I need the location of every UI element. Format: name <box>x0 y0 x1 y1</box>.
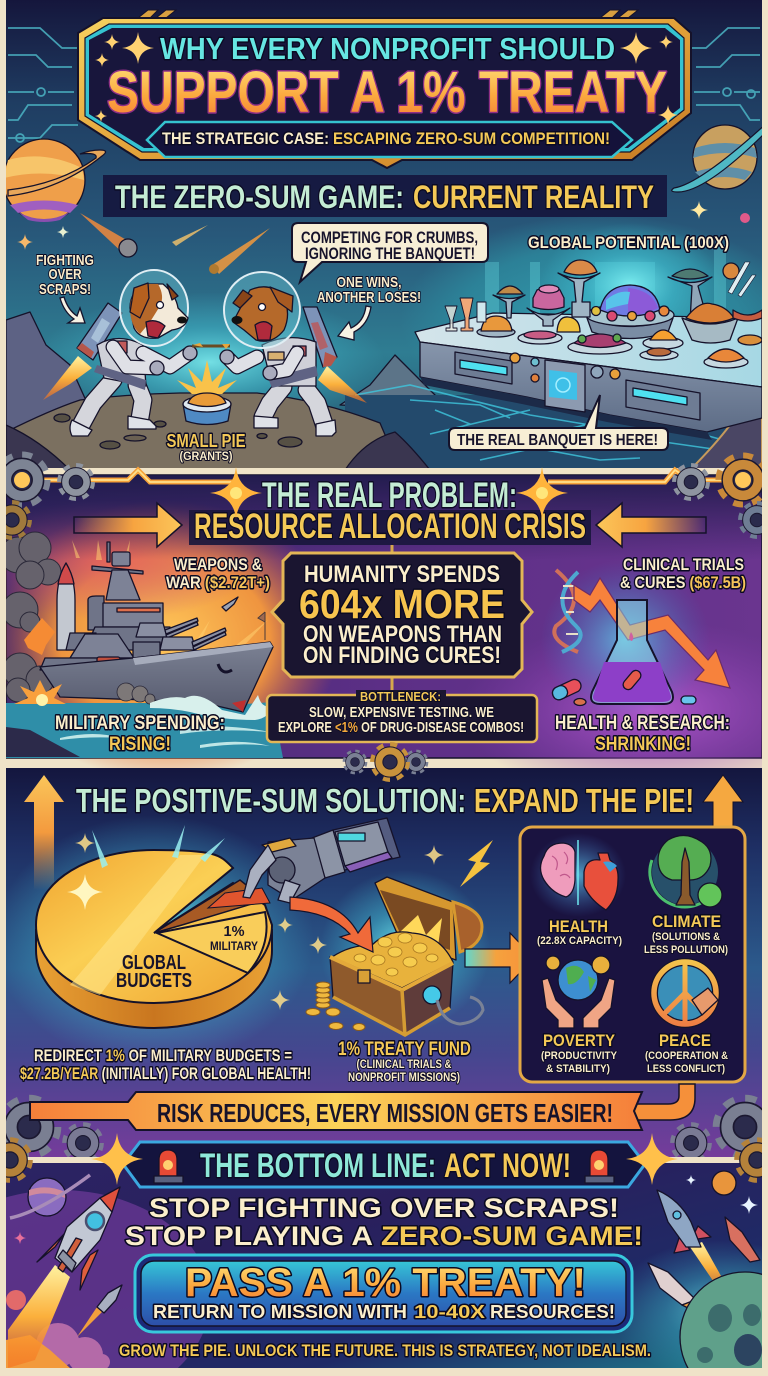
label: clinical trials: CLINICAL TRIALS <box>623 555 744 574</box>
pie slice: 1% military: MILITARY <box>210 939 258 953</box>
callout: fighting over scraps: OVER <box>48 266 82 283</box>
button: pass a 1% treaty: RESOURCES! <box>490 1302 615 1322</box>
arrow: right-pointing <box>74 503 182 547</box>
label: health and research: HEALTH & RESEARCH: <box>555 713 730 734</box>
label: military spending: RISING! <box>109 734 171 755</box>
pedestal dishes <box>558 273 600 317</box>
label: treaty fund: (CLINICAL TRIALS & <box>356 1057 452 1071</box>
callout: fighting over scraps: FIGHTING <box>36 252 94 269</box>
item: climate: (SOLUTIONS & <box>652 931 720 943</box>
hull smoke puff <box>117 683 155 704</box>
label: global potential: GLOBAL POTENTIAL (100X) <box>528 233 729 252</box>
arrow: up right <box>703 775 743 830</box>
text: redirect 1 percent <box>20 1046 311 1083</box>
callout box: 604x more: ON FINDING CURES! <box>303 642 501 669</box>
heading: positive-sum: THE POSITIVE-SUM SOLUTION: <box>76 782 466 819</box>
label: clinical trials <box>620 555 746 592</box>
torso <box>262 338 316 386</box>
banquet background <box>400 215 768 425</box>
flag and rail <box>258 612 265 640</box>
item: poverty <box>541 956 618 1075</box>
callout box: 604x more: HUMANITY SPENDS <box>304 561 500 588</box>
speech bubble: competing for crumbs: COMPETING FOR CRUMBS, <box>301 228 478 247</box>
button: pass a 1% treaty: RETURN TO MISSION WITH <box>153 1302 407 1322</box>
flask <box>591 600 673 704</box>
label: small pie: SMALL PIE <box>166 431 246 451</box>
rocket right <box>657 1190 730 1294</box>
panel: mission grid <box>520 827 745 1082</box>
banquet table <box>415 313 762 440</box>
rocket left <box>8 1187 120 1368</box>
section heading: zero-sum game: CURRENT REALITY <box>413 179 654 215</box>
label: health and research <box>555 713 730 755</box>
panel: positive-sum solution <box>0 768 768 1168</box>
right rock <box>690 397 762 470</box>
helmet and head <box>120 270 188 346</box>
heading plate: act now: THE BOTTOM LINE: <box>200 1147 436 1185</box>
label: treaty fund: NONPROFIT MISSIONS) <box>348 1070 460 1084</box>
floor <box>345 395 762 470</box>
callout box: bottleneck: EXPLORE <1% OF DRUG-DISEASE COMBOS! <box>278 719 524 736</box>
banquet glow <box>540 223 720 347</box>
heading plate: act now <box>123 1142 645 1187</box>
legs <box>263 387 325 427</box>
jetpack <box>77 303 122 360</box>
button: pass a 1% treaty <box>135 1255 632 1332</box>
rockets far right <box>648 1217 760 1315</box>
item: climate: LESS POLLUTION) <box>644 944 728 956</box>
planet ringed <box>10 1175 90 1218</box>
callout: fighting over scraps <box>36 252 94 323</box>
item: poverty: (PRODUCTIVITY <box>541 1050 618 1062</box>
panel: the real problem <box>0 475 768 800</box>
turrets <box>136 623 167 637</box>
label: small pie <box>166 431 246 463</box>
item: peace: (COOPERATION & <box>645 1050 728 1062</box>
item: peace: LESS CONFLICT) <box>647 1063 725 1075</box>
section heading: zero-sum game: THE ZERO-SUM GAME: <box>115 179 404 215</box>
dog astronaut right <box>220 272 367 436</box>
connector lines <box>390 545 394 695</box>
sparkles <box>95 32 678 125</box>
label: treaty fund: 1% TREATY FUND <box>338 1039 471 1060</box>
dna helix <box>554 570 581 652</box>
callout: one wins another loses: ONE WINS, <box>336 274 402 291</box>
smoke <box>0 532 61 702</box>
arms <box>227 353 297 373</box>
banner arrow: risk reduces <box>30 1092 642 1130</box>
callout: one wins another loses <box>317 274 421 340</box>
rock bottom-left <box>6 727 80 757</box>
label: health and research: SHRINKING! <box>595 734 691 755</box>
arms <box>113 347 190 368</box>
divider sparks <box>0 1133 768 1185</box>
small pie bowl <box>177 360 237 424</box>
falling zigzag arrow <box>574 578 730 688</box>
callout box: bottleneck <box>267 689 537 742</box>
label: treaty fund <box>338 1039 471 1084</box>
arrow: up left <box>24 775 64 890</box>
robot arm <box>243 818 400 903</box>
pie notch <box>154 880 265 933</box>
pie chart: global budgets <box>36 850 272 1028</box>
panel: zero-sum game <box>3 0 768 470</box>
text: stop fighting: ZERO-SUM GAME! <box>381 1221 643 1251</box>
rocky ground <box>6 393 430 470</box>
pie slice: 1% military <box>157 912 267 973</box>
banner arrow: risk reduces: RISK REDUCES, EVERY MISSION GETS EASIER! <box>157 1098 613 1128</box>
arrow: to left dog <box>60 297 85 323</box>
hull <box>40 642 273 712</box>
item: climate <box>644 835 728 956</box>
callout box: 604x more: ON WEAPONS THAN <box>303 621 502 648</box>
callout: fighting over scraps: SCRAPS! <box>39 281 91 298</box>
text: redirect 1 percent: REDIRECT 1% OF MILITARY BUDGETS = <box>34 1046 292 1065</box>
speech bubble: the real banquet: THE REAL BANQUET IS HERE! <box>457 432 658 449</box>
superstructure <box>40 542 226 670</box>
gears lower corners <box>2 1100 768 1161</box>
speech bubble: competing for crumbs <box>292 223 488 282</box>
stars and comets <box>17 201 750 274</box>
exhaust cloud <box>6 1290 110 1376</box>
label: military spending: MILITARY SPENDING: <box>55 713 225 734</box>
text: stop fighting: STOP PLAYING A <box>125 1221 373 1251</box>
moon <box>680 1272 768 1376</box>
rocket small left <box>77 1285 122 1337</box>
sparks <box>14 467 751 519</box>
item: poverty: POVERTY <box>543 1031 616 1050</box>
center gears <box>345 745 426 779</box>
horizon glow <box>35 292 385 432</box>
bow waves <box>150 695 272 720</box>
subtitle band <box>147 122 632 157</box>
circuit traces decoration <box>8 28 760 142</box>
missile <box>57 563 75 650</box>
connector from panel to banner <box>630 1084 695 1120</box>
callout box: 604x more: 604x MORE <box>299 581 505 627</box>
item: climate: CLIMATE <box>652 912 721 931</box>
helmet and head <box>224 272 300 348</box>
dog astronaut left <box>43 270 197 436</box>
water <box>6 702 283 758</box>
title line 1: WHY EVERY NONPROFIT SHOULD <box>160 31 615 66</box>
arrow: left-pointing <box>596 503 706 547</box>
planet right <box>672 122 768 192</box>
jet flame <box>318 366 367 403</box>
item: peace <box>645 962 728 1075</box>
heading plate: act now: ACT NOW! <box>444 1147 571 1185</box>
pills <box>550 677 696 706</box>
rays and sparkles <box>75 825 444 1010</box>
jet flame <box>43 356 92 400</box>
pie slice: 1% military: 1% <box>224 923 244 940</box>
button: pass a 1% treaty: 10-40X <box>414 1302 485 1322</box>
subtitle: THE STRATEGIC CASE: <box>162 129 329 148</box>
sky rays <box>72 540 268 658</box>
text: redirect 1 percent: $27.2B/YEAR (INITIALLY) FOR GLOBAL HEALTH! <box>20 1064 311 1083</box>
callout: one wins another loses: ANOTHER LOSES! <box>317 289 421 306</box>
pie chart: global budgets: GLOBAL <box>122 952 186 974</box>
label: weapons and war: WAR ($2.72T+) <box>166 573 270 592</box>
label: weapons and war: WEAPONS & <box>174 555 262 574</box>
torso <box>97 338 146 386</box>
fire <box>24 618 55 655</box>
sparkles <box>14 1175 758 1244</box>
top divider with gears <box>0 456 768 537</box>
button: pass a 1% treaty: PASS A 1% TREATY! <box>185 1261 586 1305</box>
pie chart: global budgets: BUDGETS <box>116 970 192 992</box>
section heading: zero-sum game <box>103 175 667 217</box>
title line 2: SUPPORT A 1% TREATY <box>107 60 667 125</box>
planet orange <box>712 1171 736 1195</box>
item: poverty: & STABILITY) <box>546 1063 610 1075</box>
treasure chest <box>306 870 490 1035</box>
explosion <box>14 680 66 706</box>
label: weapons and war <box>166 555 270 592</box>
item: health: HEALTH <box>549 917 608 936</box>
callout box: bottleneck: SLOW, EXPENSIVE TESTING. WE <box>309 704 494 721</box>
title plaque <box>78 10 691 168</box>
label: military spending <box>55 713 225 755</box>
subtitle: ESCAPING ZERO-SUM COMPETITION! <box>333 129 610 148</box>
planet left <box>3 139 106 222</box>
label: small pie: (GRANTS) <box>180 449 232 463</box>
speech bubble: the real banquet <box>449 395 668 450</box>
heading: positive-sum: EXPAND THE PIE! <box>474 782 694 819</box>
curved arrow to chest <box>290 897 373 952</box>
panel: bottom line <box>0 1133 768 1376</box>
banquet food <box>445 260 762 368</box>
coin mound <box>332 932 453 988</box>
callout box: bottleneck: BOTTLENECK: <box>360 689 441 704</box>
item: health <box>530 833 626 947</box>
heading: the real problem: RESOURCE ALLOCATION CRISIS <box>194 507 586 546</box>
icon: siren left <box>154 1150 183 1183</box>
scrap between dogs <box>192 343 230 349</box>
mountains <box>6 312 450 430</box>
arrow: to missions <box>465 933 534 983</box>
battleship <box>40 542 273 712</box>
arrow: to right dog <box>338 306 371 340</box>
speech bubble: competing for crumbs: IGNORING THE BANQUET! <box>305 244 475 263</box>
item: peace: PEACE <box>659 1031 711 1050</box>
table screen <box>545 360 585 412</box>
text: stop fighting <box>125 1193 643 1251</box>
item: health: (22.8X CAPACITY) <box>537 935 622 947</box>
jet <box>222 597 238 611</box>
icon: siren right <box>585 1150 614 1183</box>
legs <box>80 380 143 427</box>
label: clinical trials: & CURES ($67.5B) <box>620 573 746 592</box>
callout box: 604x more <box>272 553 532 677</box>
lightning bolt <box>460 840 493 887</box>
footer slogan: GROW THE PIE. UNLOCK THE FUTURE. THIS IS STRATEGY, NOT IDEALISM. <box>119 1341 651 1360</box>
chest lid <box>375 877 456 960</box>
pie glow <box>0 815 314 1065</box>
heading: the real problem <box>189 476 591 546</box>
chest front <box>330 957 405 1035</box>
jetpack <box>303 307 337 367</box>
subtitle <box>162 129 610 148</box>
heading: the real problem: THE REAL PROBLEM: <box>262 476 517 515</box>
text: stop fighting: STOP FIGHTING OVER SCRAPS! <box>149 1193 619 1223</box>
